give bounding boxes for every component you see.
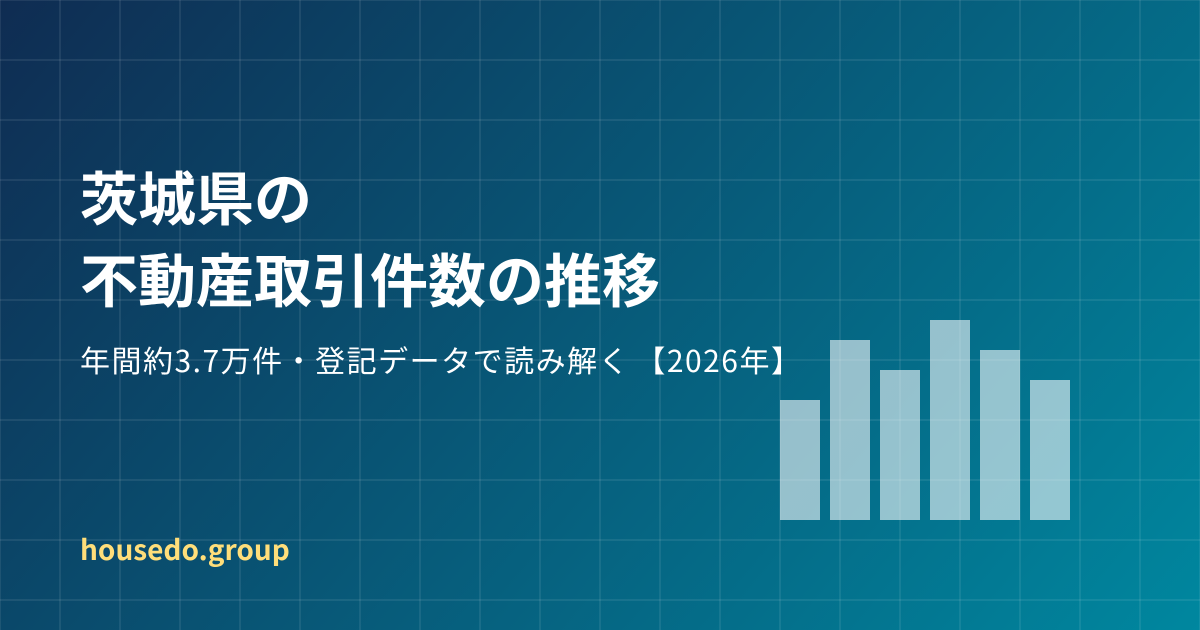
subtitle: 年間約3.7万件・登記データで読み解く 【2026年】 [80, 337, 802, 381]
bar chart [780, 320, 1070, 520]
title [80, 153, 660, 319]
title: 茨城県の [80, 153, 312, 237]
site name: housedo.group [80, 529, 290, 569]
title: 不動産取引件数の推移 [80, 235, 660, 319]
